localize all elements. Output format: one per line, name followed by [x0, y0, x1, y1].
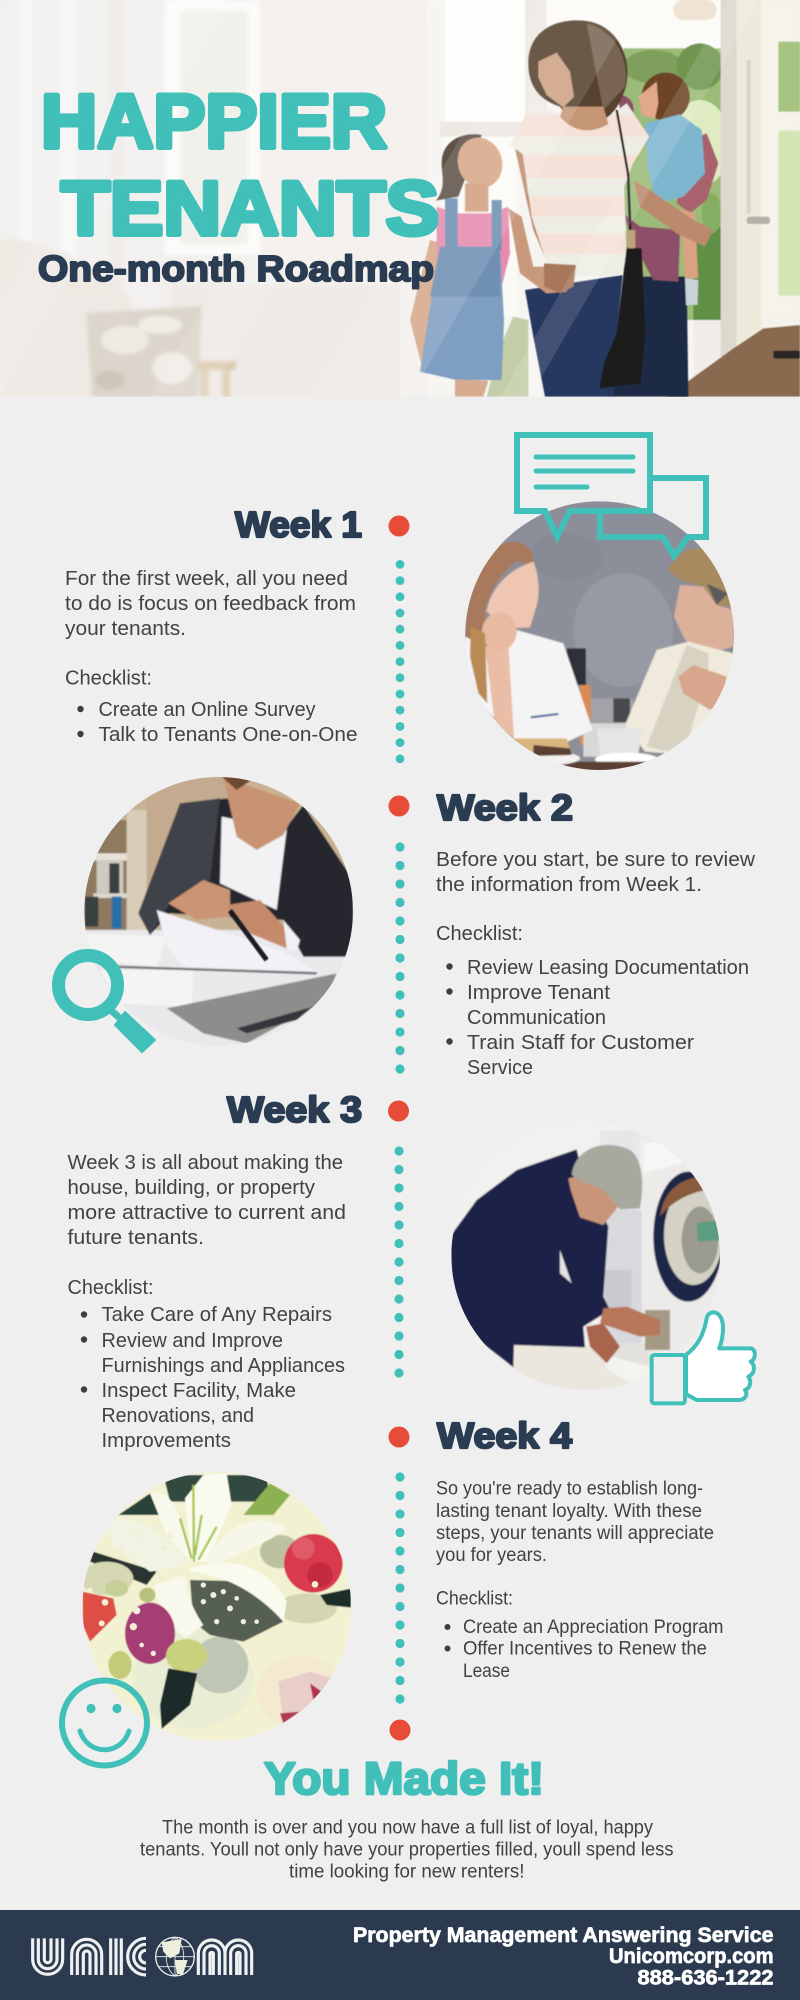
week 3 dotted timeline [394, 1146, 404, 1378]
title: Happier Tenants [41, 80, 439, 252]
closing paragraph: tenants. Youll not only have your properties filled, youll spend less [140, 1840, 674, 1860]
photo: flower arrangement [82, 1472, 351, 1740]
panel: week 2 [58, 770, 755, 1079]
week 1 timeline marker [388, 516, 410, 536]
week 4 body text: Lease [463, 1661, 510, 1682]
week 4 timeline marker [388, 1426, 410, 1448]
footer contact text: 888-636-1222 [638, 1966, 774, 1990]
week 4 body text: you for years. [436, 1545, 547, 1566]
heading: You Made It!: You Made It! [264, 1753, 544, 1804]
panel: week 1 [65, 435, 750, 780]
week 1 dotted timeline [396, 560, 404, 763]
week 4 dotted timeline [395, 1472, 405, 1704]
week 4 body text: Offer Incentives to Renew the [463, 1638, 707, 1660]
week 1 body text: Checklist: [65, 666, 152, 690]
week 3 body text: future tenants. [68, 1226, 204, 1249]
week 2 body text [436, 848, 755, 1079]
week 3 heading: Week 3 [227, 1089, 362, 1130]
footer contact text: Property Management Answering Service [353, 1924, 774, 1947]
week 2 body text: Communication [467, 1006, 606, 1029]
week 4 body text: So you're ready to establish long- [436, 1478, 703, 1500]
week 2 body text: Improve Tenant [467, 981, 610, 1004]
week 4 heading: Week 4 [437, 1415, 572, 1456]
week 3 body text [68, 1151, 346, 1452]
week 3 body text: house, building, or property [68, 1176, 316, 1199]
week 2 heading: Week 2 [437, 787, 573, 828]
week 2 body text: Checklist: [436, 922, 523, 945]
week 1 body text [65, 567, 358, 746]
week 3 body text: Improvements [102, 1429, 231, 1452]
week 2 timeline marker [388, 796, 410, 816]
diagonal light stripes [199, 20, 721, 396]
hero left room: curtain, window, sofa and pillow [3, 0, 260, 397]
icon: speech bubbles [517, 435, 706, 556]
week 2 body text: Service [467, 1056, 533, 1079]
timeline end marker [390, 1720, 410, 1740]
week 1 body text: your tenants. [65, 617, 186, 640]
closing paragraph: time looking for new renters! [289, 1862, 524, 1882]
week 2 body text: the information from Week 1. [436, 873, 702, 896]
icon: smiley face [62, 1680, 147, 1766]
footer contact text: Unicomcorp.com [609, 1945, 774, 1968]
week 3 body text: Furnishings and Appliances [102, 1354, 345, 1377]
week 3 body text: Inspect Facility, Make [102, 1379, 296, 1402]
week 3 body text: Take Care of Any Repairs [102, 1303, 332, 1326]
photo: repairman at washing machine [451, 1132, 720, 1390]
week 4 body text: steps, your tenants will appreciate [436, 1523, 714, 1544]
week 3 body text: Checklist: [68, 1276, 154, 1299]
week 4 body text [436, 1478, 724, 1682]
footer contact text [353, 1924, 774, 1990]
week 3 body text: Week 3 is all about making the [68, 1151, 343, 1174]
subtitle: One-month Roadmap: One-month Roadmap [38, 248, 434, 289]
week 2 dotted timeline [395, 842, 405, 1074]
logo: Unicom [33, 1937, 252, 1976]
week 4 body text: Create an Appreciation Program [463, 1617, 724, 1638]
week 2 body text: Review Leasing Documentation [467, 956, 749, 979]
closing paragraph [140, 1818, 674, 1882]
panel: week 4 [62, 1415, 724, 1766]
photo: man reviewing documents [84, 777, 353, 1044]
week 3 body text: more attractive to current and [68, 1201, 346, 1224]
icon: magnifying glass [58, 956, 155, 1052]
week 2 body text: Train Staff for Customer [467, 1031, 694, 1054]
hero right scene: family at the door [400, 0, 800, 397]
title: Happier Tenants: HAPPIER [41, 80, 387, 164]
title: Happier Tenants: TENANTS [61, 166, 439, 252]
week 1 heading: Week 1 [235, 504, 362, 545]
week 4 body text: lasting tenant loyalty. With these [436, 1501, 702, 1522]
week 1 body text: Talk to Tenants One-on-One [98, 723, 358, 746]
week 3 timeline marker [388, 1100, 409, 1122]
week 1 body text: Create an Online Survey [98, 698, 316, 721]
week 3 body text: Renovations, and [102, 1404, 254, 1427]
week 3 body text: Review and Improve [102, 1329, 283, 1352]
week 1 body text: to do is focus on feedback from [65, 592, 356, 615]
footer bar [0, 1910, 800, 2000]
week 2 body text: Before you start, be sure to review [436, 848, 755, 871]
closing paragraph: The month is over and you now have a full list of loyal, happy [162, 1818, 653, 1838]
week 4 body text: Checklist: [436, 1588, 513, 1610]
icon: thumbs up [652, 1312, 755, 1403]
panel: week 3 [68, 1089, 770, 1452]
hero banner photo [0, 0, 800, 400]
week 1 body text: For the first week, all you need [65, 567, 348, 590]
photo: two women talking [465, 501, 734, 770]
